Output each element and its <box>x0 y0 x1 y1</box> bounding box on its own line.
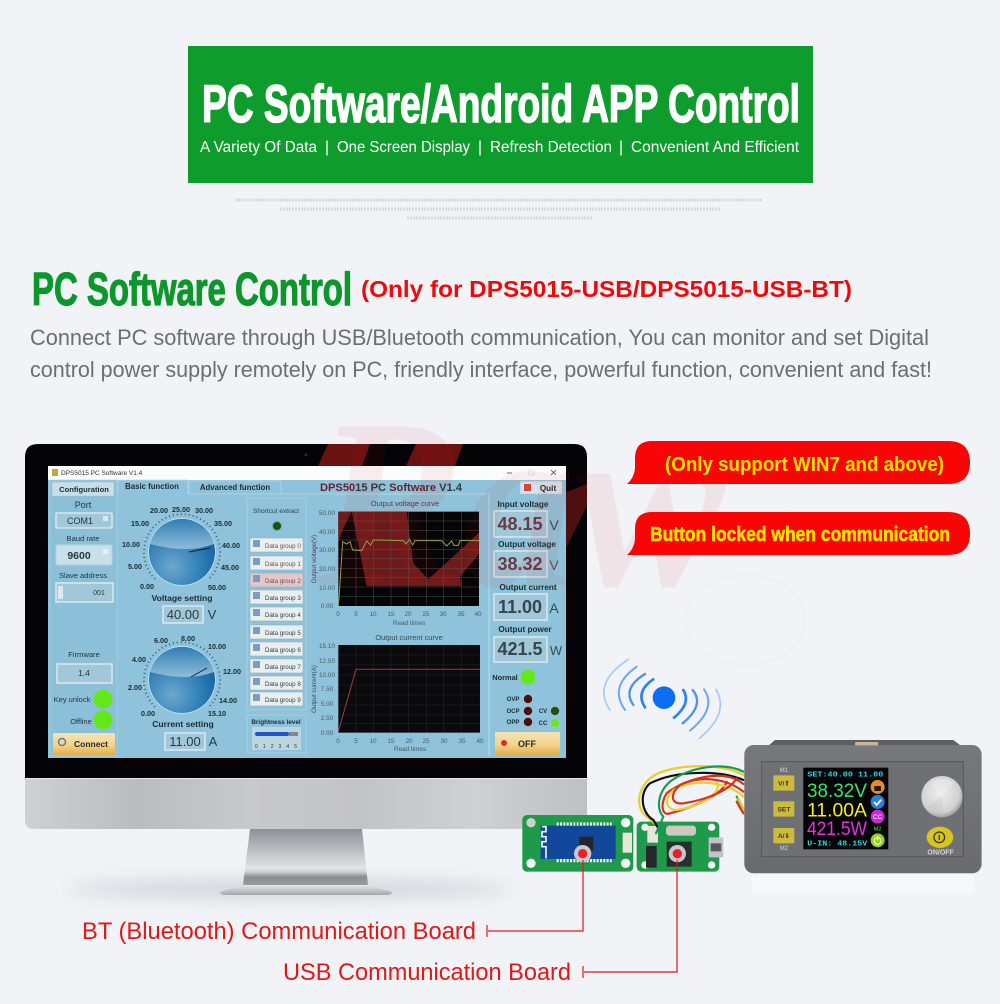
USB communication board <box>637 822 723 872</box>
offline indicator <box>70 710 112 730</box>
SET button: SET <box>777 806 790 813</box>
voltage scale labels: 15.00 <box>131 519 149 528</box>
connect button: Connect <box>74 739 108 749</box>
x axis ticks: 40 <box>474 611 482 618</box>
current knob <box>128 634 241 750</box>
x axis ticks: 10 <box>369 738 377 745</box>
colour display: 38.32V <box>807 781 867 802</box>
current scale labels: 8.00 <box>181 634 195 643</box>
y axis ticks: 12.50 <box>319 658 335 665</box>
data group buttons: Data group 4 <box>265 612 301 619</box>
firmware value <box>57 664 112 683</box>
BT board leader line <box>487 860 583 937</box>
x axis label: Read times <box>393 620 425 627</box>
green title banner <box>188 46 813 183</box>
off button: OFF <box>518 739 536 749</box>
off button <box>495 732 560 755</box>
slave address label: Slave address <box>59 571 107 580</box>
panel: connection settings: 001 <box>93 590 105 597</box>
voltage scale labels: 45.00 <box>221 563 239 572</box>
y axis ticks: 7.50 <box>321 686 334 693</box>
data group buttons: Data group 9 <box>265 697 301 704</box>
callout: button lock: Button locked when communication <box>650 524 950 546</box>
description paragraph: Connect PC software through USB/Bluetooth communication, You can monitor and set Digital <box>30 325 929 350</box>
colour display: CC <box>873 814 883 821</box>
banner subtitle: | <box>478 139 482 156</box>
output voltage reading: 38.32 <box>497 554 543 574</box>
x axis ticks: 35 <box>458 738 466 745</box>
banner subtitle <box>200 139 800 156</box>
y axis label: Output voltage(V) <box>311 535 318 583</box>
output voltage reading: Output voltage <box>498 540 556 549</box>
chart: output voltage curve <box>311 499 482 627</box>
data group buttons: Data group 8 <box>265 681 301 688</box>
normal status indicator: Normal <box>492 673 518 682</box>
firmware label: Firmware <box>68 650 100 659</box>
V button: V/⇑ <box>778 779 790 787</box>
y axis ticks: 10.00 <box>319 672 335 679</box>
voltage scale labels: 50.00 <box>208 583 226 592</box>
shortcut extract label: Shortcut extract <box>253 508 299 515</box>
voltage scale labels <box>122 505 240 592</box>
panel: brightness level <box>247 715 306 753</box>
description paragraph <box>30 325 932 382</box>
output power reading <box>494 625 563 662</box>
background faint device outline <box>685 575 805 665</box>
x axis ticks: 15 <box>387 738 395 745</box>
output voltage reading: V <box>549 557 559 573</box>
banner subtitle: Refresh Detection <box>490 139 612 156</box>
power supply module <box>744 740 982 873</box>
protection indicators <box>506 694 560 728</box>
x axis ticks: 5 <box>354 611 358 618</box>
label: BT communication board: BT (Bluetooth) Communication Board <box>82 918 476 945</box>
data group buttons: Data group 7 <box>265 664 301 671</box>
x axis ticks: 40 <box>476 738 484 745</box>
offline indicator: Offline <box>70 717 92 726</box>
voltage setting value: 40.00 <box>167 607 199 622</box>
colour display: M2 <box>874 827 881 833</box>
slave address spinner <box>56 583 113 602</box>
chart title: Output current curve <box>375 633 443 642</box>
y axis ticks: 40.00 <box>319 529 335 536</box>
shortcut indicator <box>272 522 282 530</box>
chart: output current curve <box>311 633 484 753</box>
voltage scale labels: 10.00 <box>122 540 140 549</box>
marker dot <box>669 845 686 862</box>
voltage knob <box>122 505 240 623</box>
voltage scale labels: 5.00 <box>128 562 142 571</box>
marker dot <box>574 845 591 862</box>
x axis ticks: 30 <box>439 611 447 618</box>
data group buttons: Data group 5 <box>265 630 301 637</box>
on/off button: ON/OFF <box>927 850 955 857</box>
current scale labels <box>128 634 241 718</box>
y axis ticks: 50.00 <box>319 510 335 517</box>
panel: connection settings: Configuration <box>59 485 109 494</box>
voltage scale labels: 20.00 <box>150 506 168 515</box>
description paragraph: control power supply remotely on PC, friendly interface, powerful function, convenient and fast! <box>30 357 932 382</box>
banner subtitle: | <box>619 139 623 156</box>
normal status indicator <box>492 670 536 684</box>
current setting value <box>165 733 218 750</box>
banner subtitle: Convenient And Efficient <box>631 139 800 156</box>
panel: connection settings <box>50 480 117 756</box>
baud rate selector <box>56 545 112 565</box>
protection indicators: OCP <box>506 709 520 715</box>
voltage setting value: V <box>208 607 217 622</box>
data group buttons: Data group 6 <box>265 647 301 654</box>
current setting value: 11.00 <box>169 734 201 749</box>
current scale labels: 4.00 <box>132 655 146 664</box>
output current reading: A <box>549 600 559 616</box>
callout: Windows support: (Only support WIN7 and above) <box>665 454 944 476</box>
x axis ticks: 5 <box>354 738 358 745</box>
brightness slider: 0 1 2 3 4 5 <box>255 744 297 750</box>
configuration button <box>52 482 114 496</box>
panel: shortcut data groups <box>247 498 306 710</box>
input voltage reading: Input voltage <box>498 500 549 509</box>
colour display: SET:40.00 11.00 <box>807 772 883 780</box>
monitor shadow <box>65 880 515 898</box>
M2 label: M2 <box>780 846 789 852</box>
x axis ticks: 10 <box>369 611 377 618</box>
window title icon and text: DPS5015 PC Software V1.4 <box>61 470 143 477</box>
data group buttons: Data group 0 <box>265 543 301 550</box>
x axis ticks: 20 <box>405 738 413 745</box>
x axis ticks: 20 <box>404 611 412 618</box>
x axis ticks: 15 <box>387 611 395 618</box>
connecting wires <box>639 766 745 833</box>
panel: live readings <box>489 495 563 756</box>
colour display <box>803 768 888 849</box>
x axis ticks: 25 <box>422 611 430 618</box>
data group buttons: Data group 3 <box>265 595 301 602</box>
protection indicators: CC <box>539 721 548 727</box>
connect button <box>53 733 115 755</box>
y axis ticks: 0.00 <box>321 730 334 737</box>
Bluetooth communication board <box>522 815 633 872</box>
monitor bezel <box>25 444 587 778</box>
output current reading <box>494 583 559 620</box>
M1 label: M1 <box>780 768 789 774</box>
chart plot area <box>338 645 480 733</box>
current scale labels: 6.00 <box>154 636 168 645</box>
current scale labels: 2.00 <box>128 683 142 692</box>
brightness label: Brightness level <box>251 719 301 726</box>
input voltage reading: 48.15 <box>497 514 543 534</box>
section note: model restriction: (Only for DPS5015-USB/DPS5015-USB-BT) <box>361 276 852 302</box>
colour display: 421.5W <box>807 819 868 840</box>
watermark showing on bezel <box>318 444 587 548</box>
SET button <box>773 801 794 817</box>
tab strip line <box>281 493 489 495</box>
device faceplate <box>762 762 963 857</box>
panel: connection settings: COM1 <box>67 516 93 526</box>
current scale labels: 12.00 <box>223 667 241 676</box>
window body <box>48 480 566 758</box>
y axis ticks: 20.00 <box>319 566 335 573</box>
voltage scale labels: 30.00 <box>195 506 213 515</box>
voltage curve line <box>338 539 479 606</box>
icon: wireless signal <box>604 659 720 738</box>
key unlock indicator <box>54 690 112 708</box>
colour display: U-IN: 48.15V <box>807 841 868 849</box>
banner subtitle: | <box>325 139 329 156</box>
input voltage reading: V <box>549 517 559 533</box>
y axis ticks: 0.00 <box>321 603 334 610</box>
quit button <box>520 481 562 494</box>
V button <box>773 775 794 791</box>
y axis ticks: 10.00 <box>319 585 335 592</box>
data group buttons: Data group 1 <box>265 561 301 568</box>
monitor chin <box>25 778 587 829</box>
banner subtitle: A Variety Of Data <box>200 139 317 156</box>
protection indicators: OPP <box>507 720 519 726</box>
colour display: 11.00A <box>807 800 867 821</box>
y axis ticks: 2.50 <box>321 715 334 722</box>
label: USB communication board: USB Communication Board <box>283 959 571 986</box>
chart title: Output voltage curve <box>371 499 439 508</box>
data group buttons <box>250 538 303 706</box>
current scale labels: 14.00 <box>219 696 237 705</box>
monitor <box>25 444 587 895</box>
protection indicators: OVP <box>507 697 519 703</box>
output power reading: Output power <box>498 625 552 634</box>
port selector <box>56 513 112 528</box>
window title bar <box>48 466 566 480</box>
current scale labels: 0.00 <box>141 709 155 718</box>
banner subtitle: One Screen Display <box>337 139 470 156</box>
x axis ticks <box>336 611 482 618</box>
x axis ticks: 0 <box>336 611 340 618</box>
panel: connection settings: 9600 <box>67 550 91 562</box>
baud rate label: Baud rate <box>67 534 99 543</box>
voltage setting value <box>163 606 217 623</box>
x axis ticks: 0 <box>336 738 340 745</box>
x axis ticks: 35 <box>457 611 465 618</box>
x axis ticks: 25 <box>422 738 430 745</box>
faint fine print lines <box>235 200 763 218</box>
panel: connection settings: 1.4 <box>78 668 90 678</box>
output current reading: Output current <box>499 583 557 592</box>
y axis ticks: 30.00 <box>319 547 335 554</box>
x axis ticks <box>336 738 484 745</box>
output power reading: W <box>550 643 563 658</box>
quit button: Quit <box>540 484 556 493</box>
current setting label: Current setting <box>152 719 214 729</box>
y axis ticks <box>319 643 335 737</box>
y axis ticks <box>319 510 335 610</box>
software title: DPS5015 PC Software V1.4 <box>320 482 463 494</box>
voltage scale labels: 25.00 <box>172 505 190 514</box>
port label: Port <box>75 500 92 510</box>
voltage setting label: Voltage setting <box>152 593 212 603</box>
data group buttons: Data group 2 <box>265 578 301 585</box>
on/off button <box>927 827 955 857</box>
callout: button lock <box>627 512 970 555</box>
y axis ticks: 15.10 <box>319 643 335 650</box>
y axis ticks: 5.00 <box>321 701 334 708</box>
rotary encoder <box>921 776 963 817</box>
voltage scale labels: 0.00 <box>140 582 154 591</box>
monitor stand <box>243 829 368 885</box>
current scale labels: 15.10 <box>208 709 226 718</box>
callout: Windows support <box>627 441 970 484</box>
current curve line <box>338 669 480 732</box>
software window <box>48 466 566 758</box>
device casing <box>769 740 960 745</box>
tab: basic function <box>118 480 188 494</box>
x axis ticks: 30 <box>440 738 448 745</box>
output current reading: 11.00 <box>498 597 542 617</box>
device reflection <box>752 875 974 893</box>
current scale labels: 10.00 <box>208 642 226 651</box>
x axis label: Read times <box>394 746 426 753</box>
chart plot area <box>338 512 479 606</box>
USB board leader line <box>583 860 677 978</box>
tab: basic function: Basic function <box>125 482 179 491</box>
key unlock indicator: Key unlock <box>54 695 91 704</box>
output voltage reading <box>494 540 559 577</box>
A button <box>773 828 794 843</box>
red brand watermark: Raw <box>314 370 726 638</box>
webcam <box>304 454 308 456</box>
voltage scale labels: 40.00 <box>222 541 240 550</box>
input voltage reading <box>494 500 559 537</box>
tab: advanced function: Advanced function <box>200 483 270 492</box>
A button: A/⇓ <box>778 832 790 840</box>
window controls <box>507 470 556 475</box>
current setting value: A <box>209 734 218 749</box>
output power reading: 421.5 <box>497 639 543 659</box>
tab: advanced function <box>189 481 281 494</box>
y axis label: Output current(A) <box>311 665 318 713</box>
section heading: PC Software Control: PC Software Control <box>32 263 352 315</box>
monitor base <box>220 885 392 895</box>
voltage scale labels: 35.00 <box>214 519 232 528</box>
protection indicators: CV <box>539 709 547 715</box>
